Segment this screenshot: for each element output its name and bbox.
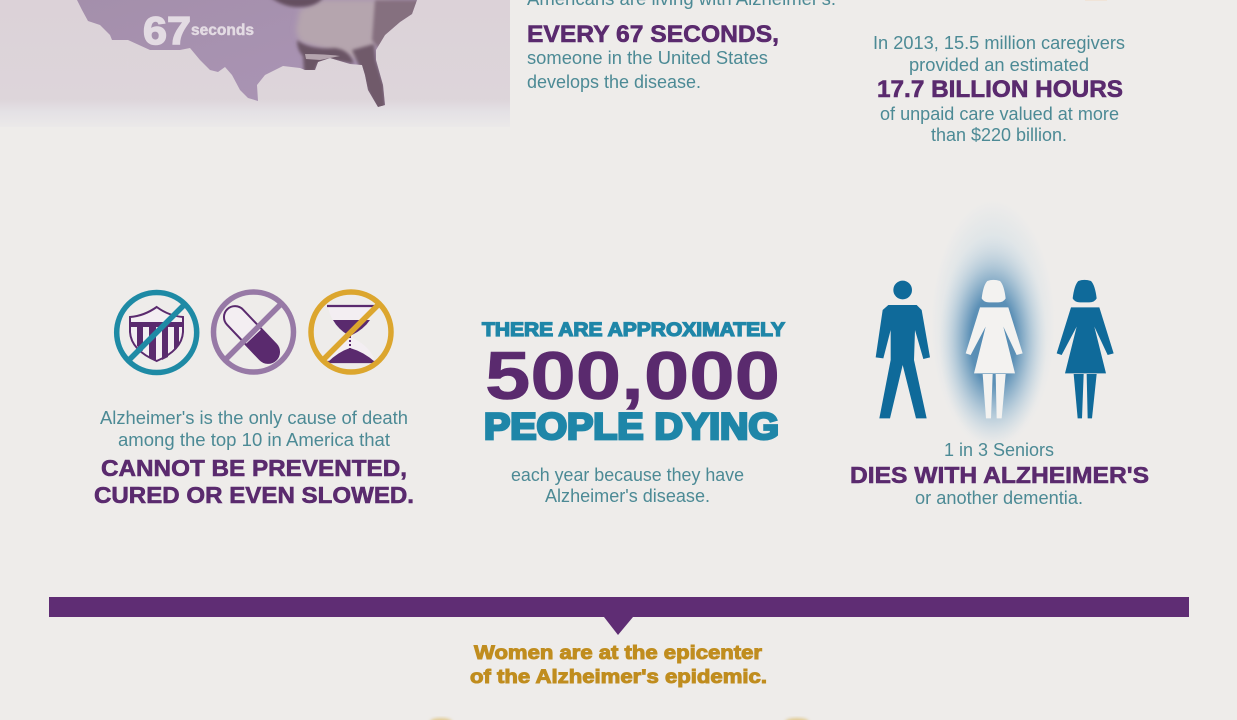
figure: man <box>876 281 930 418</box>
heading: women at the epicenter: Women are at the epicenter <box>474 642 762 664</box>
text block: caregivers: of unpaid care valued at more <box>880 103 1119 124</box>
text block: 1 in 3 seniors: or another dementia. <box>915 487 1083 508</box>
text block: caregivers <box>873 32 1125 145</box>
figure: woman <box>1057 280 1114 418</box>
text block: 500,000 people dying: 500,000 <box>485 338 780 414</box>
text block: 1 in 3 seniors: 1 in 3 Seniors <box>944 439 1054 460</box>
text block: cannot be prevented: CANNOT BE PREVENTED, <box>101 455 407 481</box>
banner bar with pointer <box>49 597 1189 635</box>
map of the United States with face photo <box>70 0 420 110</box>
text block: cannot be prevented: CURED OR EVEN SLOWED. <box>94 482 414 508</box>
icon: crossed-out hourglass <box>311 292 391 372</box>
text block: cannot be prevented: among the top 10 in America that <box>118 429 390 450</box>
label: 67 seconds <box>143 10 254 53</box>
text block: 1 in 3 seniors: DIES WITH ALZHEIMER'S <box>850 462 1149 488</box>
icon: crossed-out shield <box>117 292 197 372</box>
text block: caregivers: provided an estimated <box>909 54 1089 75</box>
text block: cannot be prevented: Alzheimer's is the only cause of death <box>100 407 408 428</box>
icon: three people, one highlighted <box>876 280 1114 418</box>
text block: caregivers: 17.7 BILLION HOURS <box>877 76 1123 103</box>
text block: 500,000 people dying: THERE ARE APPROXIMATELY <box>482 320 785 341</box>
text block: 500,000 people dying: each year because they have <box>511 464 744 485</box>
text block: caregivers: In 2013, 15.5 million caregivers <box>873 32 1125 53</box>
sliver of clipped icon at top edge <box>1085 0 1107 1</box>
text block: cannot be prevented <box>94 407 414 508</box>
text block: 500,000 people dying <box>482 320 785 506</box>
label: 67 seconds: 67 <box>143 10 191 53</box>
icon tops clipped at bottom edge <box>430 718 809 720</box>
panel: US map with face <box>0 0 510 127</box>
text block: caregivers: than $220 billion. <box>931 124 1067 145</box>
label: 67 seconds: seconds <box>191 22 254 39</box>
heading: women at the epicenter: of the Alzheimer's epidemic. <box>470 666 767 688</box>
text block: every 67 seconds: EVERY 67 SECONDS, <box>527 21 779 48</box>
text block: every 67 seconds <box>527 0 836 92</box>
text block: every 67 seconds: develops the disease. <box>527 71 701 92</box>
text block: 1 in 3 seniors <box>850 439 1149 508</box>
text block: 500,000 people dying: Alzheimer's disease. <box>545 485 710 506</box>
icon: crossed-out pill <box>214 292 294 372</box>
heading: women at the epicenter <box>470 642 767 688</box>
text block: every 67 seconds: someone in the United States <box>527 47 768 68</box>
glow behind centre figure <box>931 200 1055 450</box>
figure: highlighted woman <box>966 280 1023 418</box>
text block: 500,000 people dying: PEOPLE DYING <box>484 406 779 447</box>
